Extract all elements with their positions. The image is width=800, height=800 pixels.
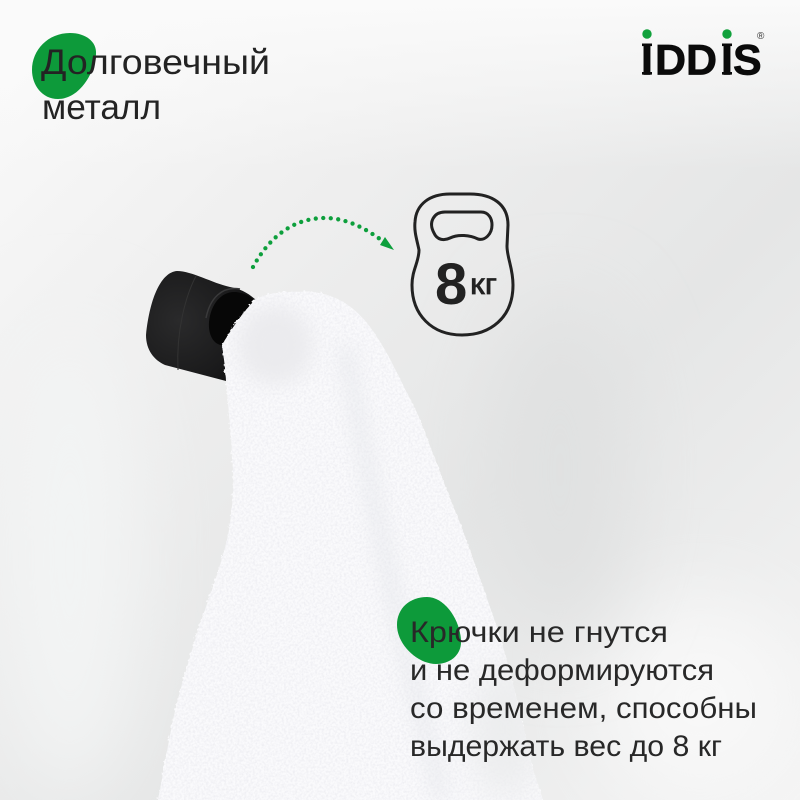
- towel: [150, 285, 550, 800]
- towel fold shading: [150, 285, 550, 800]
- kettlebell icon: [412, 194, 513, 335]
- kettlebell icon: кг: [470, 268, 497, 301]
- heading: Долговечный: [41, 43, 270, 82]
- body text: Крючки не гнутся: [410, 616, 668, 649]
- body text: выдержать вес до 8 кг: [410, 730, 722, 763]
- logo: IDDIS: IDDIS: [641, 36, 762, 84]
- weight label: 8: [435, 252, 467, 317]
- body text: [410, 616, 757, 763]
- heading: [41, 43, 270, 127]
- body text: и не деформируются: [410, 654, 714, 687]
- body text: со временем, способны: [410, 692, 757, 725]
- heading: металл: [42, 88, 161, 127]
- heading blob: [32, 33, 96, 99]
- body blob: [397, 597, 461, 664]
- hook: [146, 271, 256, 381]
- kettlebell handle: [432, 212, 492, 240]
- dotted arrow: [253, 218, 394, 267]
- logo: IDDIS: ®: [757, 31, 765, 42]
